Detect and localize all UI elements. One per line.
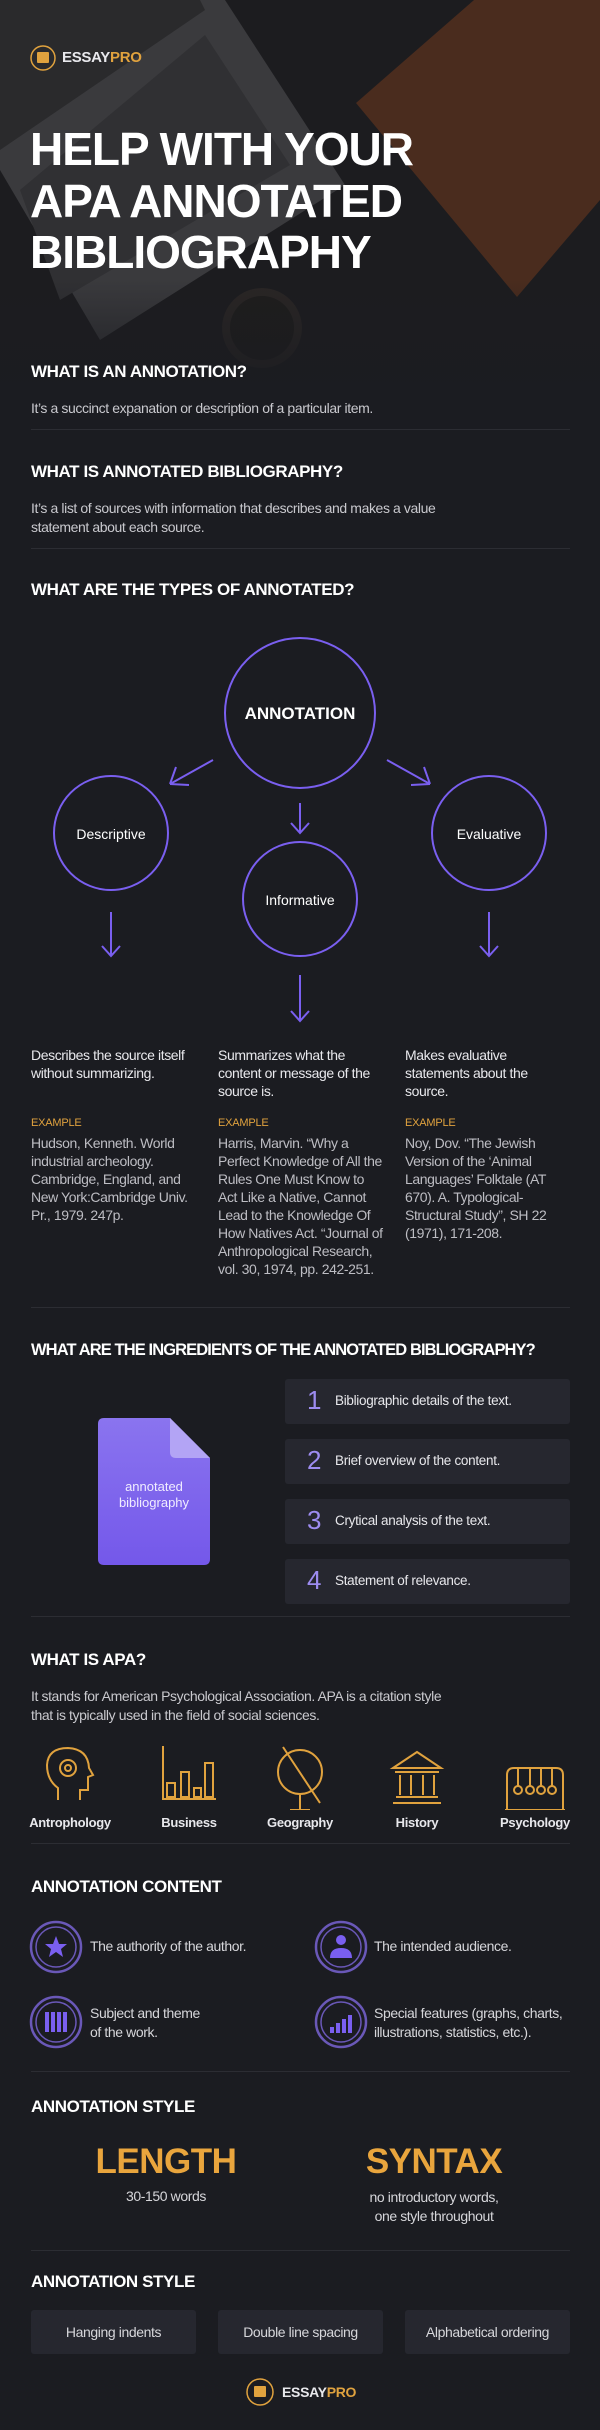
text: Hudson, Kenneth. World industrial archeology. Cambridge, England, and New York:Cambridge Univ. Pr., 1979. 247p. <box>31 1135 188 1223</box>
content item: special features: Special features (graphs, charts, illustrations, statistics, etc.). <box>374 2005 562 2040</box>
list item 1: 1 <box>307 1385 321 1415</box>
stat: syntax <box>366 2142 502 2224</box>
content item: subject <box>90 2005 200 2040</box>
heading: types: WHAT ARE THE TYPES OF ANNOTATED? <box>31 580 354 599</box>
header photo background <box>0 0 600 340</box>
diagram: annotation types: Evaluative <box>457 826 522 842</box>
heading: annotation style 2: ANNOTATION STYLE <box>31 2272 195 2291</box>
footer logo: ESSAYPRO <box>282 2384 356 2400</box>
column: descriptive <box>31 1047 188 1223</box>
diagram: annotation types: ANNOTATION <box>245 704 355 723</box>
text: annotation definition: It’s a succinct expanation or description of a particular item. <box>31 400 373 416</box>
pill: alphabetical ordering <box>405 2310 570 2354</box>
diagram: annotation types <box>53 637 547 1022</box>
label: History: History <box>396 1815 438 1830</box>
list item 2: Brief overview of the content. <box>335 1453 500 1468</box>
heading: annotation style: ANNOTATION STYLE <box>31 2097 195 2116</box>
column: descriptive: EXAMPLE <box>31 1117 82 1129</box>
stat: length: LENGTH <box>96 2142 236 2181</box>
pill: hanging indents <box>31 2310 196 2354</box>
column: evaluative: Makes evaluative statements about the source. <box>405 1047 528 1099</box>
column: informative: Summarizes what the content or message of the source is. <box>218 1047 370 1099</box>
list item 2: 2 <box>307 1445 321 1475</box>
column: informative: EXAMPLE <box>218 1117 269 1129</box>
list item 3: Crytical analysis of the text. <box>335 1513 490 1528</box>
title: BIBLIOGRAPHY <box>30 226 371 278</box>
column: evaluative: Noy, Dov. “The Jewish Version of the ‘Animal Languages’ Folktale (AT 670). A. Typological-Structural Study”, SH 22 (1971), 171-208. <box>405 1135 546 1241</box>
title <box>30 123 413 278</box>
diagram: annotation types: Informative <box>265 892 335 908</box>
stat: length: 30-150 words <box>126 2188 206 2204</box>
icon: document: bibliography <box>119 1495 190 1510</box>
label: Geography: Geography <box>267 1815 333 1830</box>
pill: double line spacing <box>218 2310 383 2354</box>
label: Antrophology: Antrophology <box>29 1815 111 1830</box>
pill: double line spacing: Double line spacing <box>243 2324 358 2340</box>
list item 1: Bibliographic details of the text. <box>335 1393 512 1408</box>
icons: disciplines <box>46 1746 565 1810</box>
label: Psychology: Psychology <box>500 1815 570 1830</box>
column: informative: Harris, Marvin. “Why a Perfect Knowledge of All the Rules One Must Know to Act Like a Native, Cannot Lead to the Knowledge Of How Natives Act. “Journal of Anthropological Research, vol. 30, 1974, pp. 242-251. <box>218 1135 383 1277</box>
title: APA ANNOTATED <box>30 174 402 226</box>
list item 4: Statement of relevance. <box>335 1573 471 1588</box>
column: descriptive: Describes the source itself without summarizing. <box>31 1047 184 1081</box>
title: HELP WITH YOUR <box>30 123 413 175</box>
stat: syntax: no introductory words, <box>370 2189 498 2205</box>
heading: ingredients: WHAT ARE THE INGREDIENTS OF THE ANNOTATED BIBLIOGRAPHY? <box>31 1341 535 1359</box>
heading: what is annotated bibliography: WHAT IS ANNOTATED BIBLIOGRAPHY? <box>31 462 343 481</box>
diagram: annotation types: Descriptive <box>76 826 146 842</box>
column: evaluative: EXAMPLE <box>405 1117 456 1129</box>
icon: document <box>98 1418 210 1565</box>
list item 4: 4 <box>307 1565 321 1595</box>
heading: what is APA: WHAT IS APA? <box>31 1650 146 1669</box>
list item 3 <box>285 1499 570 1544</box>
footer logo <box>246 2378 356 2406</box>
content item: audience: The intended audience. <box>374 1938 512 1954</box>
list item 2 <box>285 1439 570 1484</box>
content item: subject: Subject and theme <box>90 2005 200 2021</box>
label: Business: Business <box>161 1815 217 1830</box>
logo: ESSAYPRO <box>62 49 142 66</box>
column: informative <box>218 1047 384 1277</box>
column: evaluative <box>405 1047 546 1241</box>
content icons <box>30 1920 368 2048</box>
text: APA definition: It stands for American Psychological Association. APA is a citation style that is typically used in the field of social sciences. <box>31 1688 441 1723</box>
content item: authority: The authority of the author. <box>90 1938 246 1954</box>
list item 3: 3 <box>307 1505 321 1535</box>
content item: subject: of the work. <box>90 2024 158 2040</box>
pill: alphabetical ordering: Alphabetical ordering <box>426 2324 549 2340</box>
heading: annotation content: ANNOTATION CONTENT <box>31 1877 221 1896</box>
list item 1 <box>285 1379 570 1424</box>
stat: syntax: SYNTAX <box>366 2142 502 2181</box>
heading: what is an annotation: WHAT IS AN ANNOTATION? <box>31 362 247 381</box>
list item 4 <box>285 1559 570 1604</box>
text: bibliography definition: It’s a list of sources with information that describes and makes a value statement about each source. <box>31 500 435 535</box>
pill: hanging indents: Hanging indents <box>66 2324 161 2340</box>
logo <box>30 45 142 71</box>
icon: document: annotated <box>125 1479 183 1494</box>
stat: syntax: one style throughout <box>375 2208 493 2224</box>
stat: length <box>96 2142 236 2204</box>
